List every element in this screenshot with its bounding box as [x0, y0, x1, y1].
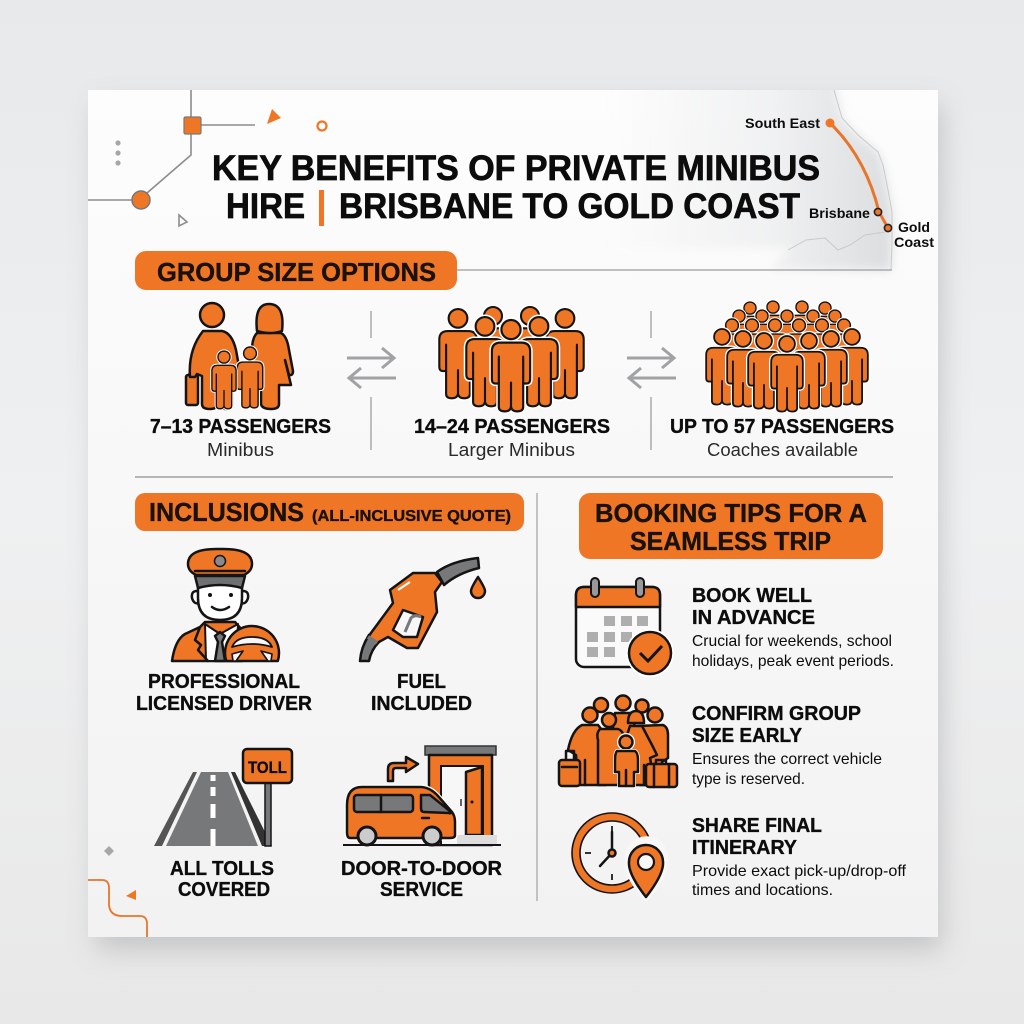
decoration: corner line bottom left — [88, 846, 147, 937]
icon: professional driver — [172, 549, 279, 661]
title — [212, 149, 820, 226]
label: fuel included: INCLUDED — [371, 693, 472, 715]
tip text: book well in advance: BOOK WELL — [692, 585, 812, 607]
tip text: share final itinerary: SHARE FINAL — [692, 815, 822, 837]
icon: group with luggage — [559, 696, 677, 787]
label: door-to-door service — [341, 858, 503, 901]
tip text: confirm group size early: type is reserved. — [692, 771, 805, 788]
tip text: share final itinerary: times and locations. — [692, 882, 833, 899]
tip text: confirm group size early: CONFIRM GROUP — [692, 703, 861, 725]
label: up to 57 passengers: Coaches available — [707, 440, 858, 460]
icon: clock with location pin — [572, 813, 664, 897]
label: 7-13 passengers: 7–13 PASSENGERS — [150, 416, 331, 438]
decoration: circuit lines top left — [88, 90, 326, 226]
label: all tolls covered — [170, 858, 274, 901]
tip text: book well in advance: holidays, peak event periods. — [692, 653, 894, 670]
map marker: Brisbane — [874, 208, 882, 216]
label: professional licensed driver — [136, 671, 313, 715]
icon: calendar with check — [576, 578, 671, 674]
panel: infographic card — [88, 80, 938, 937]
map: south east Queensland — [716, 90, 934, 273]
heading: booking tips — [579, 493, 883, 559]
tip text: book well in advance — [692, 585, 894, 670]
heading: inclusions: (ALL-INCLUSIVE QUOTE) — [312, 508, 511, 525]
tip text: book well in advance: Crucial for weekends, school — [692, 633, 892, 650]
label: 7-13 passengers — [150, 416, 331, 460]
heading: booking tips: BOOKING TIPS FOR A — [595, 498, 867, 528]
heading: inclusions: INCLUSIONS — [149, 497, 304, 527]
tip text: share final itinerary — [692, 815, 907, 899]
heading: group size options: GROUP SIZE OPTIONS — [157, 257, 436, 287]
divider — [650, 311, 652, 450]
steering wheel — [225, 626, 279, 661]
divider — [536, 493, 538, 901]
divider — [370, 311, 372, 450]
label: fuel included — [371, 671, 472, 715]
label: up to 57 passengers: UP TO 57 PASSENGERS — [670, 416, 894, 438]
label: fuel included: FUEL — [397, 671, 446, 693]
map label: Gold Coast: Coast — [894, 234, 934, 250]
map marker: Gold Coast — [884, 224, 892, 232]
label: door-to-door service: DOOR-TO-DOOR — [341, 858, 503, 880]
map label: South East: South East — [745, 115, 820, 131]
tip text: share final itinerary: ITINERARY — [692, 837, 798, 859]
icon: crowd up to 57 passengers — [706, 301, 868, 412]
panel shadow — [96, 104, 942, 950]
label: all tolls covered: COVERED — [178, 879, 270, 901]
tip text: share final itinerary: Provide exact pick-up/drop-off — [692, 863, 907, 880]
label: up to 57 passengers — [670, 416, 894, 460]
heading: booking tips: SEAMLESS TRIP — [630, 526, 831, 556]
tip text: confirm group size early: SIZE EARLY — [692, 725, 803, 747]
label: 7-13 passengers: Minibus — [207, 440, 274, 460]
title: KEY BENEFITS OF PRIVATE MINIBUS — [212, 149, 820, 188]
label: door-to-door service: SERVICE — [380, 879, 463, 901]
label: professional licensed driver: PROFESSIONAL — [148, 671, 300, 693]
icon: toll road — [154, 749, 292, 846]
label: professional licensed driver: LICENSED DRIVER — [136, 693, 313, 715]
icon: toll road: TOLL — [248, 758, 287, 777]
tip text: confirm group size early — [692, 703, 882, 788]
arrows: swap between sizes 2 — [627, 348, 676, 388]
map label: Brisbane: Brisbane — [809, 205, 870, 221]
icon: door-to-door van — [343, 746, 501, 845]
label: all tolls covered: ALL TOLLS — [170, 858, 274, 880]
tip text: confirm group size early: Ensures the correct vehicle — [692, 751, 882, 768]
title: BRISBANE TO GOLD COAST — [339, 187, 800, 226]
tip text: book well in advance: IN ADVANCE — [692, 607, 815, 629]
heading: group size options — [135, 251, 892, 290]
map marker: South East — [826, 118, 834, 128]
label: 14-24 passengers — [414, 416, 610, 460]
icon: fuel nozzle — [360, 558, 485, 661]
label: 14-24 passengers: 14–24 PASSENGERS — [414, 416, 610, 438]
map label: Gold Coast: Gold — [898, 219, 930, 235]
icon: family 7-13 passengers — [186, 303, 293, 409]
divider — [135, 476, 893, 478]
title: HIRE — [226, 187, 305, 226]
heading: inclusions — [135, 493, 524, 531]
label: 14-24 passengers: Larger Minibus — [448, 440, 575, 460]
route line — [830, 123, 888, 228]
arrows: swap between sizes 1 — [347, 348, 396, 388]
icon: group 14-24 passengers — [439, 307, 584, 411]
